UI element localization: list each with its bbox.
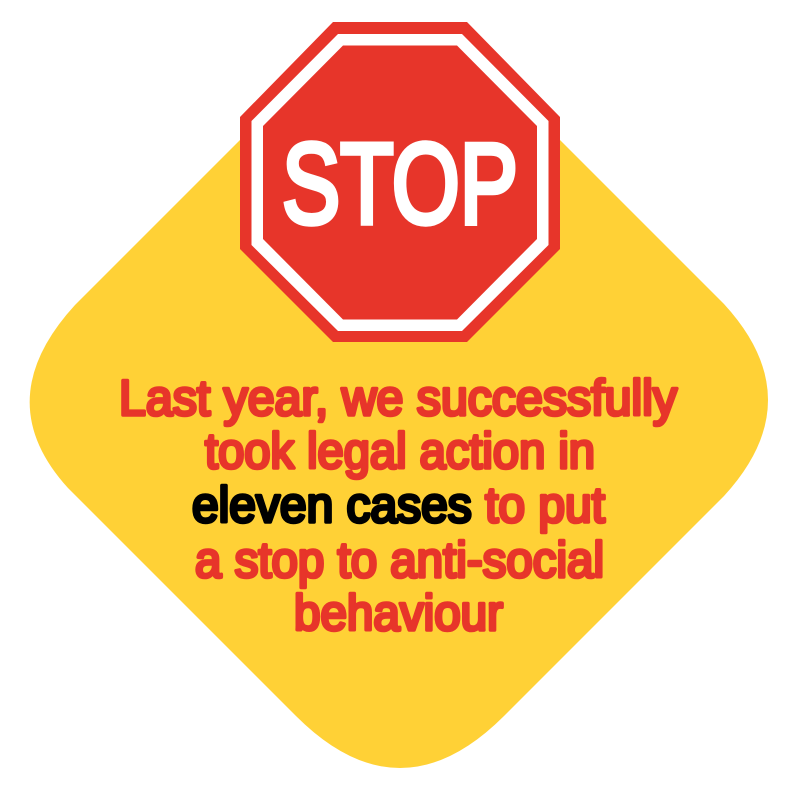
message text: eleven cases to put <box>192 477 605 533</box>
message text: a stop to anti-social <box>195 532 604 588</box>
message text: behaviour <box>294 585 503 641</box>
message text: took legal action in <box>205 423 595 479</box>
message text <box>119 370 677 641</box>
icon: stop sign <box>240 22 560 342</box>
message text: Last year, we successfully <box>119 370 677 426</box>
stop sign label: STOP <box>282 121 518 248</box>
